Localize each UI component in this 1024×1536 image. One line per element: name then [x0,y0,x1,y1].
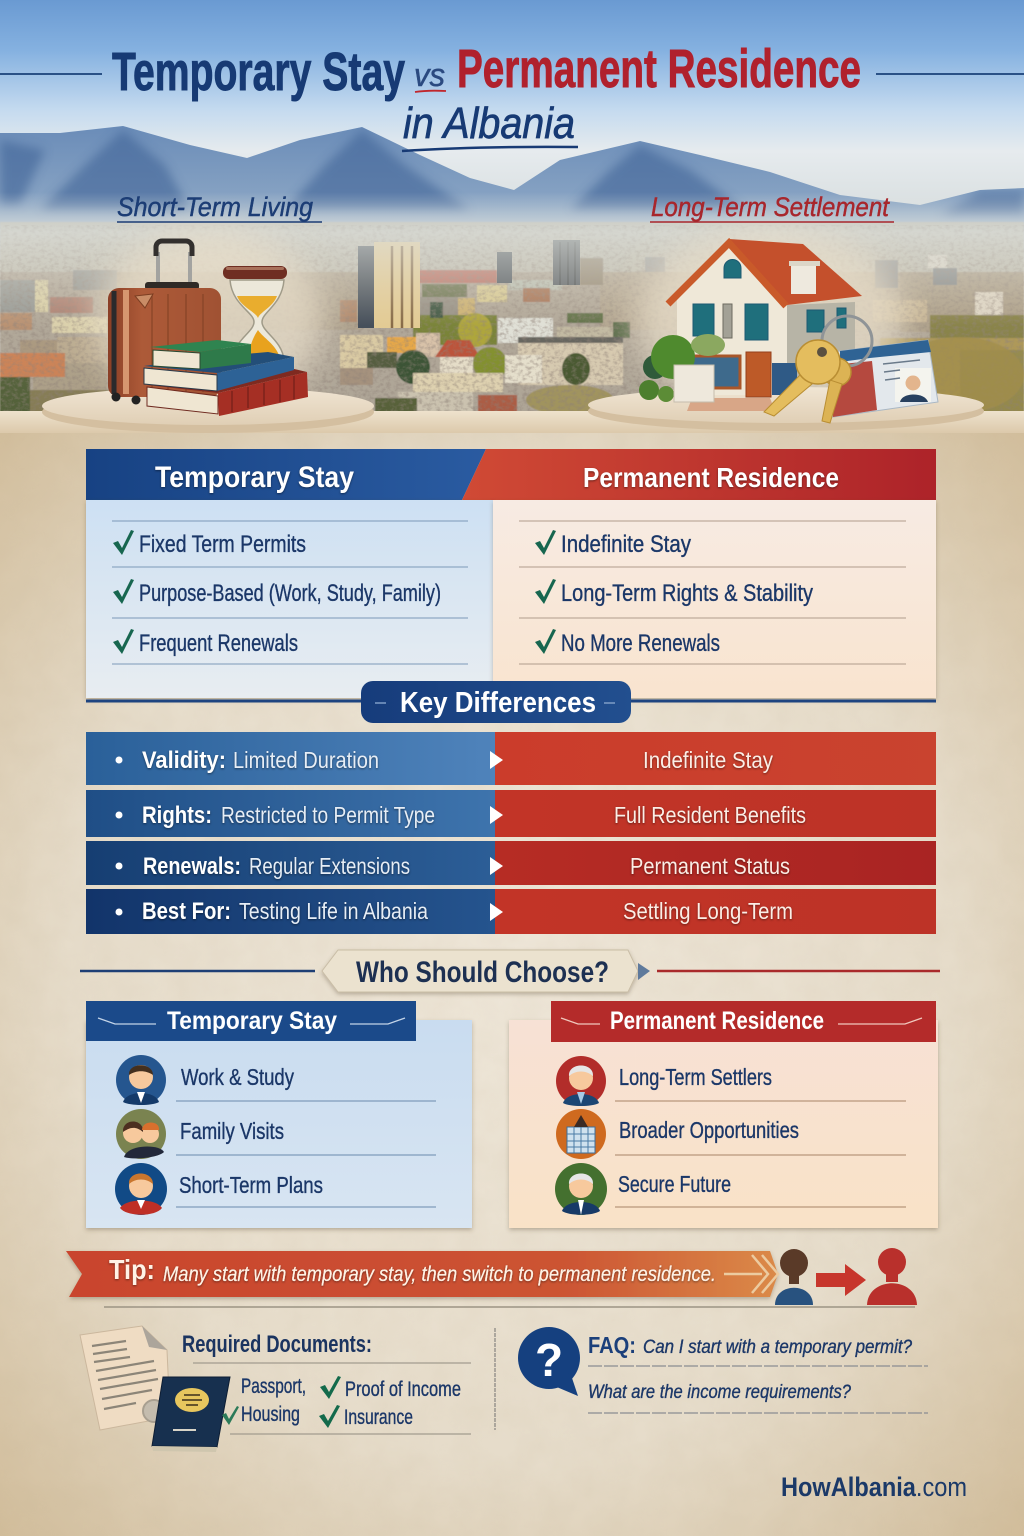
panel header: Permanent Residence: Permanent Residence [610,1007,824,1035]
row: renewals [86,841,936,885]
platform: right [588,387,984,431]
platform: left [42,387,374,433]
red book [218,372,308,416]
icon: stack of books [144,340,308,416]
blue book [217,357,294,391]
icon: document [80,1326,170,1430]
heading: Who Should Choose? [80,950,940,992]
feature: Purpose-Based [113,579,441,607]
row: rights: Rights: [142,802,212,829]
avatar: long-term settlers [556,1056,606,1106]
atmospheric haze [0,192,1024,415]
subtitle: in Albania: in Albania [403,99,575,148]
row: validity: Validity: [142,747,226,774]
check and Housing: Housing [241,1403,300,1426]
front wall [677,248,787,395]
panel: permanent residence features [493,500,936,698]
header band: Permanent Residence: Permanent Residence [583,462,839,493]
check and Housing [222,1403,300,1426]
feature: Purpose-Based: Purpose-Based (Work, Study, Family) [139,580,441,607]
soft glow behind right objects [635,230,905,410]
panel: FAQ [588,1332,928,1413]
icon: red arrow [816,1264,866,1296]
header band: Temporary Stay: Temporary Stay [155,461,354,494]
avatar: short-term plans [115,1163,167,1215]
tall towers [358,240,580,328]
chimney [789,261,820,294]
subtitle underline [402,147,578,151]
row: best for [86,889,936,934]
label: Short-Term Living: Short-Term Living [117,192,313,222]
row: renewals: Regular Extensions [249,853,410,879]
title [0,39,1024,151]
banner arrow [724,1255,778,1293]
item: Work & Study: Work & Study [181,1064,294,1090]
avatar: work and study [116,1055,166,1105]
heading: Who Should Choose?: Who Should Choose? [356,956,609,989]
row: rights [86,790,936,837]
item: Short-Term Plans: Short-Term Plans [179,1172,323,1198]
stone ledge [0,411,1024,433]
door [746,352,771,397]
side wall [787,302,855,400]
row: best for: Best For: [142,898,231,925]
feature: Frequent Renewals: Frequent Renewals [139,630,298,657]
icon: blue person [775,1249,813,1305]
avatar: secure future [555,1163,607,1215]
check and Proof of Income [320,1376,461,1401]
icon: suitcase [108,241,221,404]
item: Passport: Passport, [241,1375,306,1398]
green book [150,340,251,352]
row: renewals: Renewals: [143,853,241,880]
sky [0,0,1024,420]
parchment background [0,411,1024,1536]
brand: HowAlbania.com: HowAlbania.com [781,1472,967,1502]
panel header: Permanent Residence [551,1001,936,1042]
feature: Long-Term Rights & Stability: Long-Term Rights & Stability [561,580,813,607]
vertical divider [494,1328,496,1430]
icon: hourglass [223,266,287,360]
row: renewals: Permanent Status [630,853,790,879]
check and Proof of Income: Proof of Income [345,1378,461,1401]
icon: keys [764,316,872,423]
feature: Indefinite Stay: Indefinite Stay [561,531,691,558]
row: best for: Testing Life in Albania [239,898,428,924]
panel: required documents [182,1331,471,1434]
icon: passport [152,1377,230,1452]
comparison table [86,732,936,934]
title: Temporary Stay: Temporary Stay [112,42,405,102]
row: validity [86,732,936,785]
panel: temporary stay features [86,500,493,698]
icon: house [668,239,862,411]
label: Long-Term Settlement: Long-Term Settlement [651,192,890,222]
header band: Temporary Stay [86,449,486,500]
icon: ID card [832,340,938,417]
windows [693,260,846,340]
check and Insurance [319,1405,413,1429]
FAQ question 1: Can I start with a temporary permit? [643,1337,912,1358]
tip label: Tip: [109,1254,155,1285]
row: best for: Settling Long-Term [623,898,793,924]
item: Family Visits: Family Visits [180,1118,284,1144]
avatar: family visits [116,1109,166,1159]
icon: question bubble: ? [535,1334,563,1386]
city texture [0,225,1024,412]
feature: Fixed Term Permits [113,530,306,558]
heading: Required Documents: Required Documents: [182,1331,372,1358]
title rules [0,73,1024,75]
banner ribbon [66,1251,778,1297]
header band: Permanent Residence [462,449,936,500]
feature: Fixed Term Permits: Fixed Term Permits [139,531,306,558]
item: Broader Opportunities: Broader Opportunities [619,1117,799,1143]
avatar: broader opportunities [556,1109,606,1159]
icon: shrubs [639,334,725,402]
roof [729,239,862,305]
FAQ label: FAQ: [588,1332,636,1358]
tree overlay right [896,337,1024,413]
mountains [0,126,1024,224]
soft glow behind left objects [95,230,325,410]
feature: No More Renewals [535,629,720,657]
tip banner [66,1248,917,1305]
title: vs: vs [414,57,445,93]
hero background: sky, mountains and city [0,0,1024,420]
FAQ question 2: What are the income requirements? [588,1382,851,1403]
vs underline [415,91,446,92]
row: rights: Restricted to Permit Type [221,802,435,828]
feature: No More Renewals: No More Renewals [561,630,720,657]
item: Secure Future: Secure Future [618,1171,731,1197]
icon: question bubble [518,1327,580,1396]
row: rights: Full Resident Benefits [614,802,806,828]
feature: Frequent Renewals [113,629,298,657]
path [687,398,775,411]
item: Long-Term Settlers: Long-Term Settlers [619,1064,772,1090]
shop window [692,356,740,388]
check and Insurance: Insurance [344,1406,413,1429]
icon: red person [867,1248,917,1305]
panel header: Temporary Stay [86,1001,416,1041]
panel: who should choose temporary stay [86,1001,472,1228]
tip text: Many start with temporary stay, then switch to permanent residence. [163,1263,716,1286]
row: validity: Indefinite Stay [643,747,773,773]
panel header: Temporary Stay: Temporary Stay [167,1007,337,1035]
divider [104,1306,915,1308]
mailbox [772,363,797,395]
row: validity: Limited Duration [233,747,379,773]
title: Permanent Residence: Permanent Residence [457,39,861,99]
heading: Key Differences [86,681,936,723]
city buildings [0,222,1024,415]
panel: who should choose permanent residence [509,1001,938,1228]
gable trim [668,243,786,306]
heading: Key Differences: Key Differences [400,687,596,719]
brick wall [674,365,714,402]
